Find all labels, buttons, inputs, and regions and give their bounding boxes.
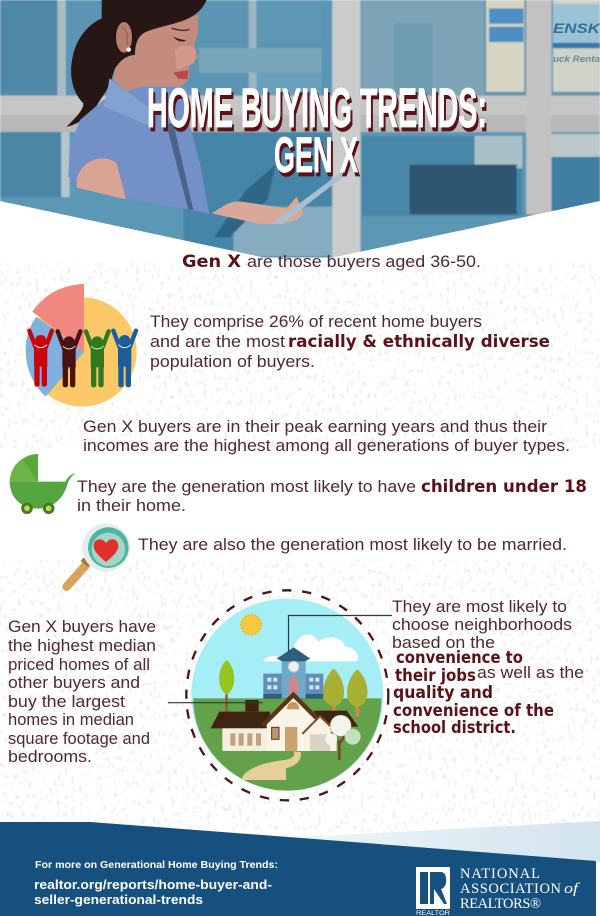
eye, brow, lips bbox=[173, 37, 187, 42]
title bbox=[147, 76, 489, 187]
footer link text bbox=[34, 859, 278, 907]
trees bbox=[219, 660, 367, 717]
tablet bbox=[272, 161, 357, 224]
woman blouse, arm, hand and tablet bbox=[68, 78, 357, 224]
arm bbox=[77, 158, 126, 199]
sky bbox=[191, 599, 383, 791]
footer link text: For more on Generational Home Buying Trends: bbox=[35, 859, 278, 871]
garden path bbox=[242, 751, 301, 780]
text: neighborhoods: school district. bbox=[393, 718, 516, 738]
text: neighborhoods: convenience of the bbox=[393, 701, 554, 721]
leader line to right text bbox=[288, 616, 392, 652]
text: peak earning years: incomes are the highest among all generations of buyer types. bbox=[83, 436, 570, 455]
truck lettering in window: ENSK bbox=[553, 20, 600, 36]
icon: pie chart with four people bbox=[26, 284, 137, 407]
text: peak earning years bbox=[83, 417, 570, 455]
text: neighborhoods: their jobs bbox=[395, 666, 476, 686]
text: neighborhoods: as well as the bbox=[477, 663, 584, 682]
title shadow: GEN X bbox=[276, 131, 360, 187]
footer link text: seller-generational-trends bbox=[34, 893, 203, 907]
house bbox=[211, 692, 358, 751]
text: children under 18: They are the generation most likely to have bbox=[77, 477, 416, 496]
text: median priced homes: buy the largest bbox=[8, 692, 125, 711]
collar bbox=[103, 78, 157, 125]
intro line: are those buyers aged 36-50. bbox=[247, 252, 481, 271]
logo: national association of realtors: of bbox=[564, 881, 580, 897]
text: share of buyers: and are the most bbox=[150, 332, 285, 351]
person: blue bbox=[113, 331, 136, 387]
title text bbox=[147, 76, 487, 183]
text: children under 18: children under 18 bbox=[421, 477, 587, 497]
text: neighborhoods: quality and bbox=[393, 683, 493, 703]
text: share of buyers: They comprise 26% of recent home buyers bbox=[150, 312, 482, 331]
text: share of buyers: population of buyers. bbox=[150, 352, 315, 371]
earring bbox=[126, 47, 131, 52]
text: median priced homes: homes in median bbox=[8, 710, 134, 729]
person: brown bbox=[58, 331, 80, 387]
blue wedge bbox=[26, 317, 84, 397]
hair and ponytail bbox=[67, 0, 207, 127]
text: neighborhoods: convenience to bbox=[396, 648, 523, 668]
title text: GEN X bbox=[274, 127, 358, 183]
icon: magnifier with heart bbox=[67, 524, 130, 587]
woman head and ponytail bbox=[67, 0, 207, 127]
placket bbox=[166, 123, 193, 210]
logo: realtor R bbox=[416, 867, 451, 916]
truck lettering in window: uck Renta bbox=[553, 54, 600, 64]
illustration: house and school in circle bbox=[186, 590, 388, 800]
text: median priced homes bbox=[8, 617, 156, 766]
hero photo: woman with tablet at window bbox=[0, 0, 600, 260]
pie base bbox=[27, 297, 137, 407]
text: median priced homes: the highest median bbox=[8, 636, 156, 655]
neck and face bbox=[113, 15, 198, 115]
sun bbox=[241, 615, 261, 635]
intro line: Gen X bbox=[182, 252, 241, 272]
footer link text: realtor.org/reports/home-buyer-and- bbox=[34, 878, 272, 892]
text: children under 18: in their home. bbox=[77, 496, 186, 515]
pink wedge bbox=[32, 284, 84, 352]
text: share of buyers bbox=[150, 312, 550, 371]
person: green bbox=[86, 331, 109, 387]
text: married: They are also the generation most likely to be married. bbox=[138, 535, 567, 554]
text: peak earning years: Gen X buyers are in their peak earning years and thus their bbox=[83, 417, 547, 436]
text: median priced homes: square footage and bbox=[8, 729, 150, 748]
logo: national association of realtors: NATIONAL bbox=[460, 866, 540, 882]
text: neighborhoods: choose neighborhoods bbox=[392, 615, 572, 634]
logo: national association of realtors: ASSOCIATION bbox=[460, 881, 562, 897]
text: median priced homes: Gen X buyers have bbox=[8, 617, 156, 636]
footer band bbox=[0, 821, 600, 916]
person: red bbox=[29, 331, 52, 387]
text: neighborhoods: based on the bbox=[392, 633, 495, 652]
ground bbox=[193, 698, 381, 791]
ear bbox=[116, 22, 132, 53]
leader line to left text bbox=[168, 702, 263, 704]
cloud bbox=[263, 634, 358, 661]
logo: national association of realtors: REALTORS® bbox=[460, 896, 541, 912]
text: median priced homes: priced homes of all bbox=[8, 655, 150, 674]
truck lettering in window bbox=[553, 20, 600, 64]
text: children under 18 bbox=[77, 477, 587, 515]
blouse bbox=[68, 87, 209, 214]
text: neighborhoods: They are most likely to bbox=[392, 597, 567, 616]
icon: baby stroller bbox=[10, 454, 76, 513]
text: median priced homes: bedrooms. bbox=[8, 747, 92, 766]
hand bbox=[212, 197, 303, 224]
text: share of buyers: racially & ethnically diverse bbox=[288, 332, 550, 352]
white chevron below hero bbox=[0, 201, 600, 262]
title shadow bbox=[149, 80, 489, 187]
logo: national association of realtors bbox=[460, 866, 580, 912]
text: neighborhoods bbox=[392, 597, 584, 738]
text: median priced homes: other buyers and bbox=[8, 673, 140, 692]
window panes and frames bbox=[0, 0, 600, 260]
school bbox=[263, 647, 323, 699]
blossom tree bbox=[325, 715, 361, 760]
dashed ring bbox=[186, 590, 388, 800]
